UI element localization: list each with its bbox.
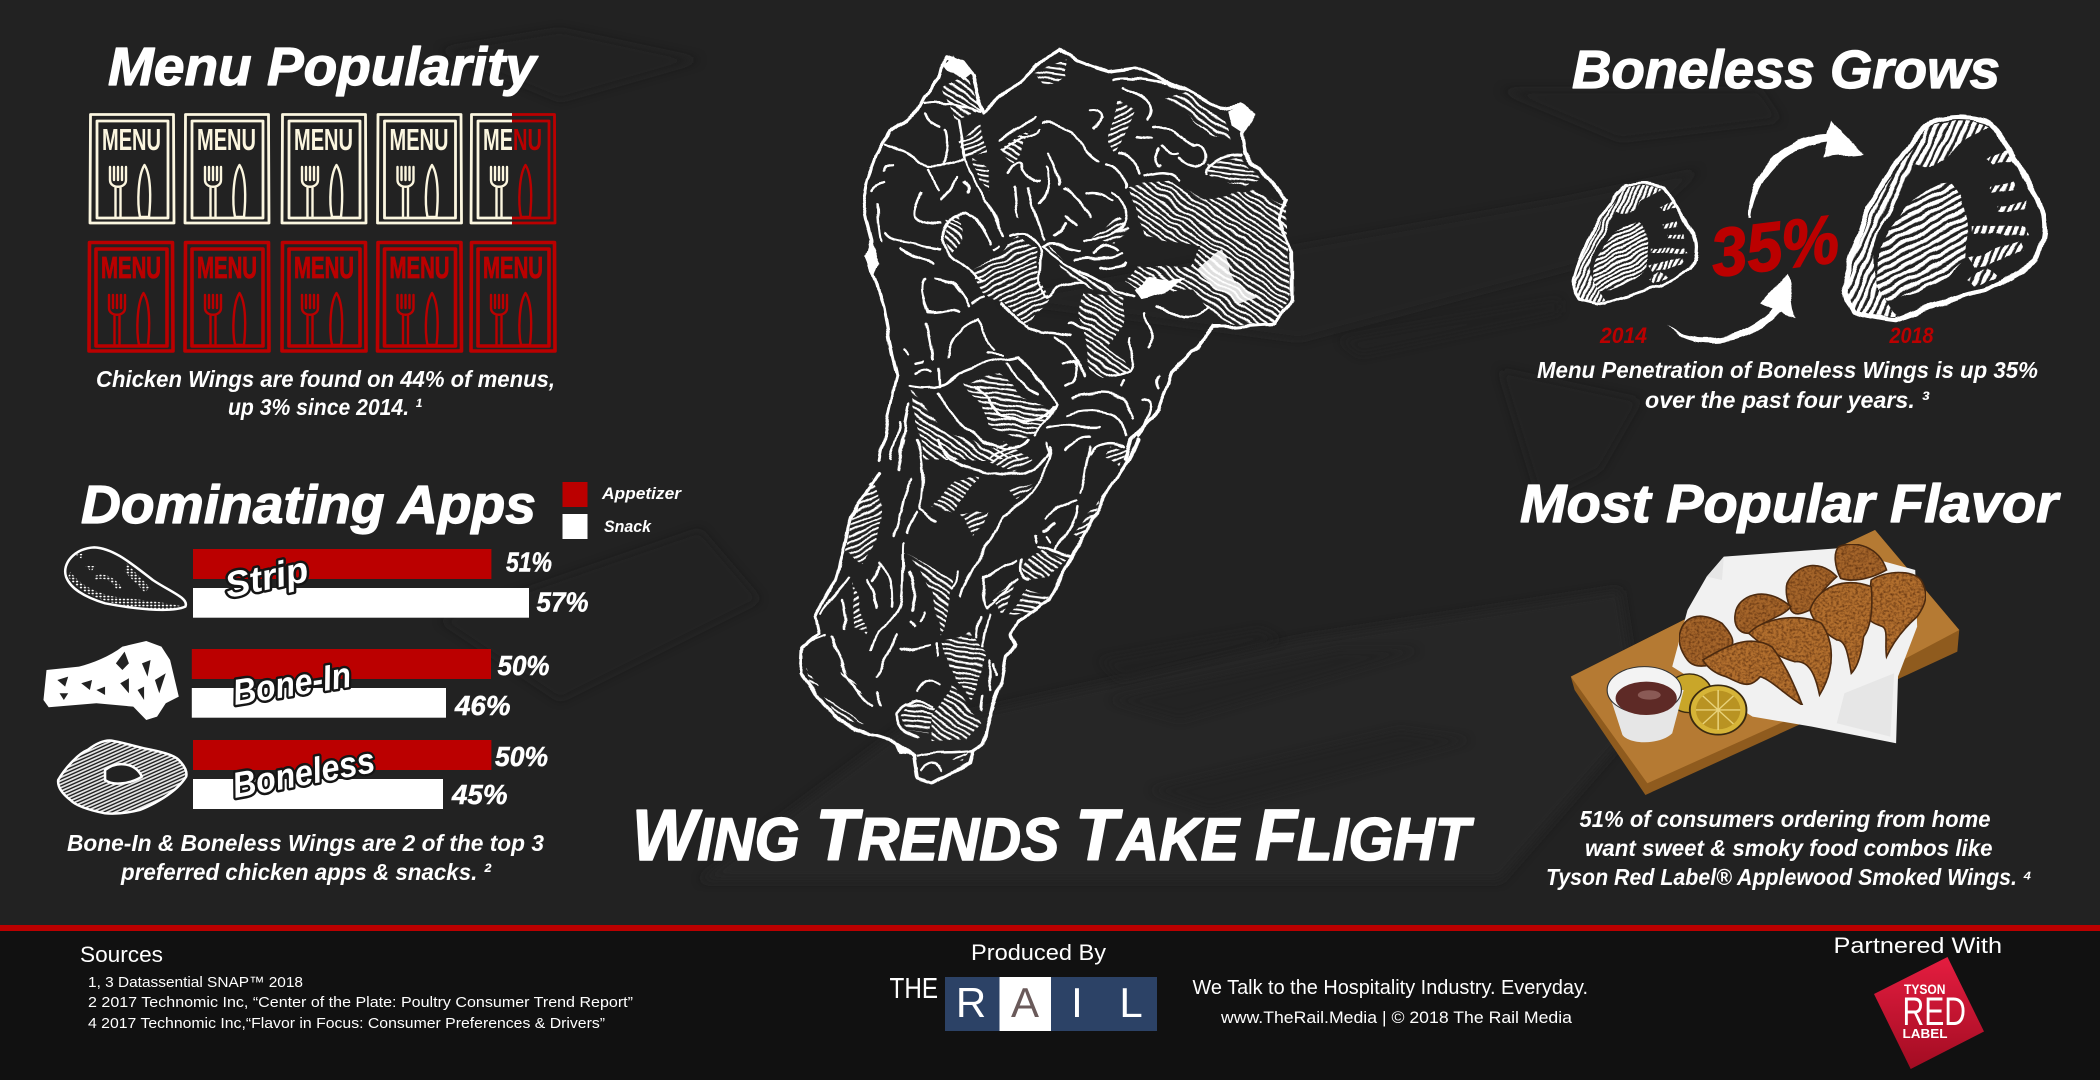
red menu icon row: MENU	[101, 250, 161, 285]
lemon slices	[1667, 674, 1746, 735]
lower hatching	[808, 440, 1128, 762]
lower outline	[801, 440, 1138, 783]
sauce cup	[1607, 667, 1684, 742]
cream menu icon row: MENU	[483, 122, 542, 157]
main title: WING TRENDS TAKE FLIGHT	[632, 796, 1474, 876]
logo: Tyson Red Label: TYSON	[1904, 981, 1946, 997]
bars: boneless: Boneless	[229, 739, 378, 806]
icon: small boneless wing 2014	[1574, 182, 1696, 304]
sources block: Sources	[80, 942, 163, 967]
cream menu icon row: MENU	[390, 122, 448, 157]
logo: Tyson Red Label: LABEL	[1902, 1026, 1948, 1041]
napkin	[1672, 548, 1917, 743]
icon: large boneless wing 2018	[1845, 117, 2044, 320]
text: menu popularity caption: Chicken Wings are found on 44% of menus,	[96, 366, 555, 392]
red menu icon row: MENU	[294, 250, 354, 285]
heading: Dominating Apps: Dominating Apps	[81, 475, 536, 535]
growth graphic	[1574, 117, 2044, 343]
heading: Most Popular Flavor: Most Popular Flavor	[1520, 474, 2061, 534]
lower contour lines	[808, 440, 1090, 770]
arrow: upper	[1748, 122, 1864, 218]
tagline	[1192, 977, 1588, 1027]
bars: strip: 57%	[536, 586, 589, 618]
text: boneless grows caption: over the past four years. ³	[1645, 387, 1930, 413]
red menu icon row: MENU	[483, 250, 543, 285]
bars: bone-in: Bone-In	[230, 654, 354, 713]
text: menu popularity caption: up 3% since 2014. ¹	[228, 394, 422, 420]
red menu icon row	[89, 242, 555, 351]
upper contour lines	[873, 79, 1241, 460]
red divider	[0, 925, 2100, 931]
cream menu icon row: MENU	[102, 122, 161, 157]
bars: boneless	[193, 739, 548, 810]
wings	[1679, 544, 1926, 705]
tagline: We Talk to the Hospitality Industry. Everyday.	[1192, 977, 1588, 999]
illustration: wings on wooden board	[1571, 530, 1959, 795]
upper outline	[863, 48, 1291, 460]
footer band	[0, 925, 2100, 1080]
sources block: 4 2017 Technomic Inc,“Flavor in Focus: Consumer Preferences & Drivers”	[88, 1015, 605, 1032]
logo: The Rail: A	[1011, 979, 1039, 1026]
sources block	[80, 942, 633, 1032]
red menu icon row: MENU	[390, 250, 450, 285]
logo: Tyson Red Label: RED	[1902, 990, 1966, 1034]
bars: bone-in	[192, 649, 550, 721]
logo: The Rail: THE	[890, 973, 938, 1005]
upper hatching	[864, 57, 1290, 460]
icon: bone-in wing	[43, 641, 179, 720]
logo: The Rail: R	[956, 979, 986, 1026]
text: flavor caption: want sweet & smoky food combos like	[1585, 835, 1993, 861]
text: flavor caption: Tyson Red Label® Applewood Smoked Wings. ⁴	[1546, 864, 2032, 890]
logo: The Rail: L	[1119, 979, 1143, 1026]
text: dominating apps caption	[67, 830, 544, 885]
bars: bone-in: 46%	[454, 690, 511, 721]
cream menu icon row	[90, 114, 555, 223]
text: dominating apps caption: Bone-In & Boneless Wings are 2 of the top 3	[67, 830, 544, 856]
drumstick lower section	[801, 440, 1138, 783]
label: 2018: 2018	[1889, 323, 1934, 348]
tagline: www.TheRail.Media | © 2018 The Rail Media	[1220, 1008, 1573, 1027]
bars: boneless: 50%	[495, 741, 548, 772]
label: 2014: 2014	[1599, 323, 1647, 348]
logo: The Rail	[890, 973, 1157, 1031]
bars: boneless: 45%	[451, 779, 508, 810]
text: boneless grows caption: Menu Penetration of Boneless Wings is up 35%	[1537, 357, 2038, 383]
sources block: 1, 3 Datassential SNAP™ 2018	[88, 974, 303, 991]
background chalk smudges	[440, 30, 1780, 880]
text: flavor caption: 51% of consumers ordering from home	[1580, 806, 1991, 832]
darker chalk streaks	[1100, 300, 1560, 810]
bars: strip	[193, 546, 589, 618]
logo: Tyson Red Label	[1874, 957, 1984, 1069]
callout: 35%: 35%	[1707, 201, 1843, 292]
text: menu popularity caption	[96, 366, 555, 420]
cream menu icon row: MENU	[197, 122, 256, 157]
produced by: Produced By	[971, 940, 1106, 965]
partnered with: Partnered With	[1834, 933, 2002, 958]
cream menu icon row: MENU	[294, 122, 353, 157]
heading: Menu Popularity: Menu Popularity	[108, 37, 539, 97]
chicken drumstick illustration	[801, 48, 1291, 783]
heading: Boneless Grows: Boneless Grows	[1572, 40, 2000, 100]
icon: chicken strip	[65, 547, 186, 610]
chart legend: Appetizer	[601, 484, 682, 503]
board	[1571, 530, 1959, 795]
chart legend: Snack	[604, 517, 652, 536]
text: dominating apps caption: preferred chicken apps & snacks. ²	[120, 859, 492, 885]
bars: bone-in: 50%	[498, 650, 550, 681]
drumstick upper section	[863, 48, 1291, 460]
logo: The Rail: I	[1071, 979, 1083, 1026]
text: boneless grows caption	[1537, 357, 2038, 413]
sources block: 2 2017 Technomic Inc, “Center of the Plate: Poultry Consumer Trend Report”	[88, 994, 633, 1011]
red menu icon row: MENU	[197, 250, 257, 285]
bars: strip: Strip	[221, 548, 312, 606]
text: flavor caption	[1546, 806, 2032, 890]
chart legend	[562, 482, 682, 539]
menu icon grid	[89, 114, 555, 351]
icon: boneless wing	[58, 741, 187, 814]
bars: strip: 51%	[506, 546, 552, 578]
arrow: lower	[1667, 273, 1795, 343]
